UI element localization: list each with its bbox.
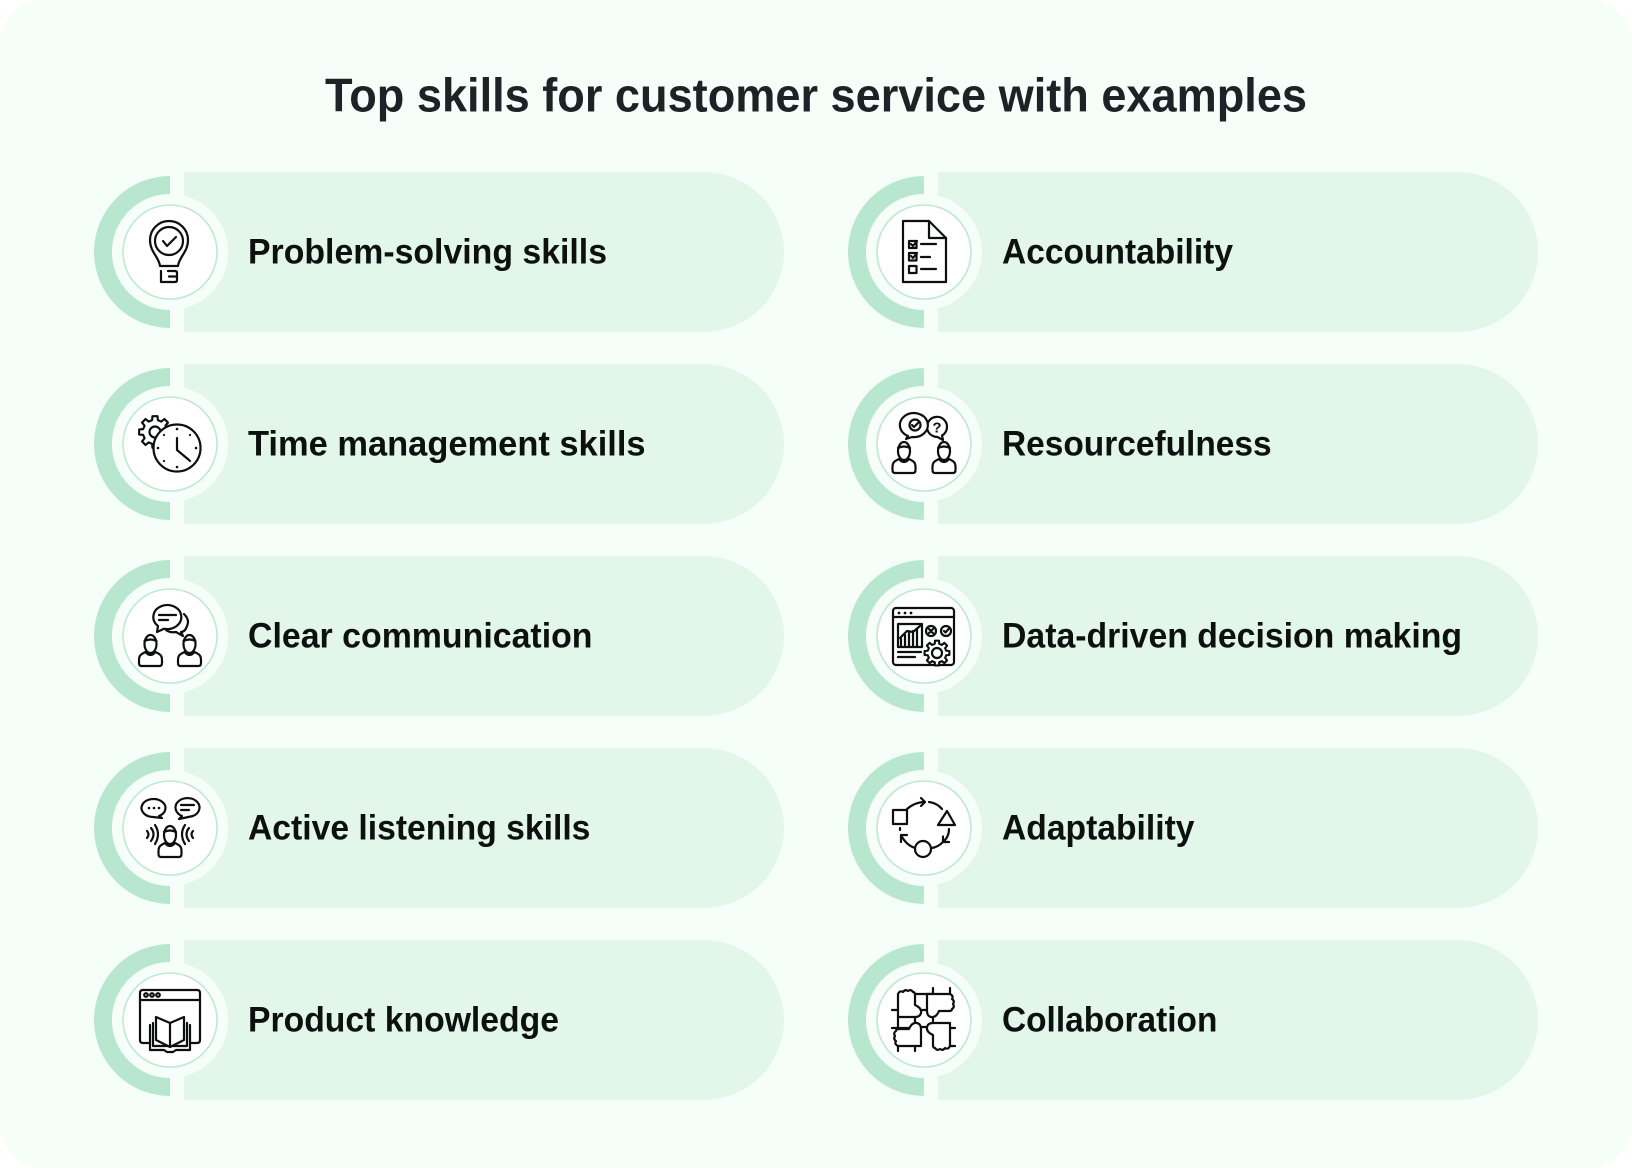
label: Accountability <box>1002 232 1234 272</box>
label: Resourcefulness <box>1002 424 1272 464</box>
panel: Accountability <box>848 172 1538 332</box>
icon: analytics dashboard <box>893 608 954 665</box>
panel: Time management skills <box>94 364 784 524</box>
label: Problem-solving skills <box>248 232 607 272</box>
icon: two people with question and answer bubbles: ? <box>932 420 942 436</box>
panel: Problem-solving skills <box>94 172 784 332</box>
panel: Collaboration <box>848 940 1538 1100</box>
panel: Clear communication <box>94 556 784 716</box>
label: Data-driven decision making <box>1002 616 1462 656</box>
panel: Adaptability <box>848 748 1538 908</box>
icon: checklist document <box>903 221 946 282</box>
icon: four interlocked hands <box>892 988 955 1051</box>
panel: Resourcefulness <box>848 364 1538 524</box>
icon: browser window with open book <box>140 990 200 1052</box>
label: Active listening skills <box>248 808 590 848</box>
icon: clock and gear <box>139 416 200 472</box>
icon: two people with question and answer bubbles <box>892 413 956 473</box>
panel: Active listening skills <box>94 748 784 908</box>
panel: Product knowledge <box>94 940 784 1100</box>
label: Collaboration <box>1002 1000 1217 1040</box>
icon: two people talking <box>139 605 201 666</box>
title: Top skills for customer service with examples <box>325 68 1307 122</box>
label: Clear communication <box>248 616 592 656</box>
icon: listener with speech bubbles <box>141 798 200 857</box>
icon: light bulb with check <box>150 221 188 282</box>
panel: Data-driven decision making <box>848 556 1538 716</box>
icon: shapes in a cycle <box>893 798 955 857</box>
label: Time management skills <box>248 424 646 464</box>
label: Product knowledge <box>248 1000 559 1040</box>
label: Adaptability <box>1002 808 1195 848</box>
